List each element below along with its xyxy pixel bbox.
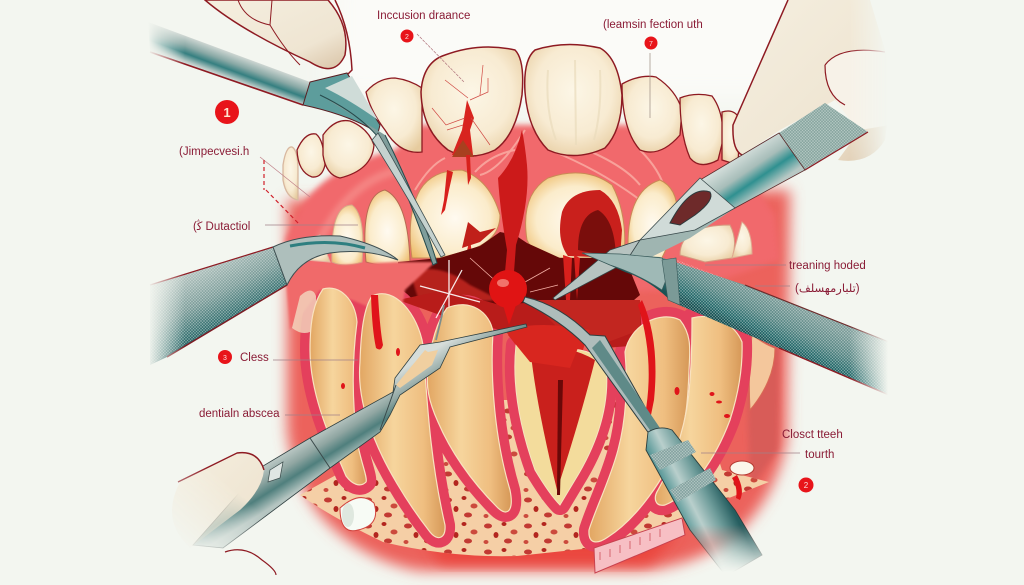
badge 2 lower right [798, 478, 814, 492]
badge 3: 3 [223, 355, 227, 362]
label: Closct tteeh [701, 429, 843, 461]
blood stream [489, 130, 528, 325]
panel: lower gum ledge left [285, 262, 435, 333]
gum sockets [310, 288, 742, 542]
blood cavity in right tooth [560, 190, 622, 300]
cracks and blood on left second-row tooth [441, 155, 496, 255]
label: Cless [218, 350, 358, 364]
label: Leamsin fection uth [603, 19, 703, 118]
panel: second row teeth [305, 170, 752, 265]
label: Jimpecvesh: (Jimpecvesi.h [179, 146, 249, 158]
label: treating hoded: treaning hoded [789, 260, 866, 272]
instrument: lower left finger [172, 453, 264, 548]
label: Cless: Cless [240, 352, 269, 364]
blood streak on roots [341, 295, 730, 420]
instrument: top-left glove fingers [205, 0, 352, 75]
instrument: right upper hand [733, 0, 890, 161]
panel: upper gum [285, 125, 780, 300]
panel: lower roots [310, 288, 742, 542]
sparkle [420, 258, 558, 318]
panel: center inflamed tissue [398, 290, 642, 372]
tissue flap right [749, 335, 775, 410]
arc below finger [225, 550, 276, 575]
badge 2 lower right: 2 [804, 481, 809, 490]
icon: upper central incisor right [525, 44, 622, 156]
label: Closct tteeh: tourth [805, 449, 834, 461]
label: arabic-like caption [755, 283, 860, 296]
label: arabic-like caption: (فلسهمرابلت) [795, 283, 860, 296]
label: Jimpecvesh [179, 146, 310, 225]
label: Closct tteeh: Closct tteeh [782, 429, 843, 441]
badge 1: 1 [223, 105, 231, 120]
badge 2: 2 [405, 34, 409, 41]
label: Incusion drainage [377, 10, 470, 82]
instrument: right upper scalpel [553, 103, 868, 300]
instrument: top-left elevator [148, 22, 445, 265]
label: Leamsin fection uth: (leamsin fection uth [603, 19, 703, 31]
icon: split pulp tooth [508, 327, 607, 505]
icon: white cotton pellet [340, 498, 376, 531]
top white glow [330, 0, 810, 100]
badge 1 [215, 100, 239, 124]
panel: upper back teeth [283, 76, 740, 200]
instrument: lower right probe [523, 297, 762, 576]
label: Dutactiol: (ﯕ Dutactiol [193, 219, 250, 233]
panel: dark cavity [398, 232, 640, 320]
label: Incusion drainage: Inccusion draance [377, 10, 470, 22]
icon: white nodule right [730, 461, 754, 500]
icon: upper central incisor with cracks [421, 47, 523, 157]
panel: soft red tissue behind roots [287, 190, 790, 571]
instrument: left handle [150, 236, 398, 365]
instrument: lower left forceps [193, 305, 527, 548]
panel: bone and gum around roots [300, 288, 769, 556]
instrument: right lower handle [582, 253, 889, 395]
label: dentialn abscea: dentialn abscea [199, 408, 280, 420]
icon: pink ruler [594, 518, 685, 573]
badge 7: 7 [649, 41, 653, 48]
